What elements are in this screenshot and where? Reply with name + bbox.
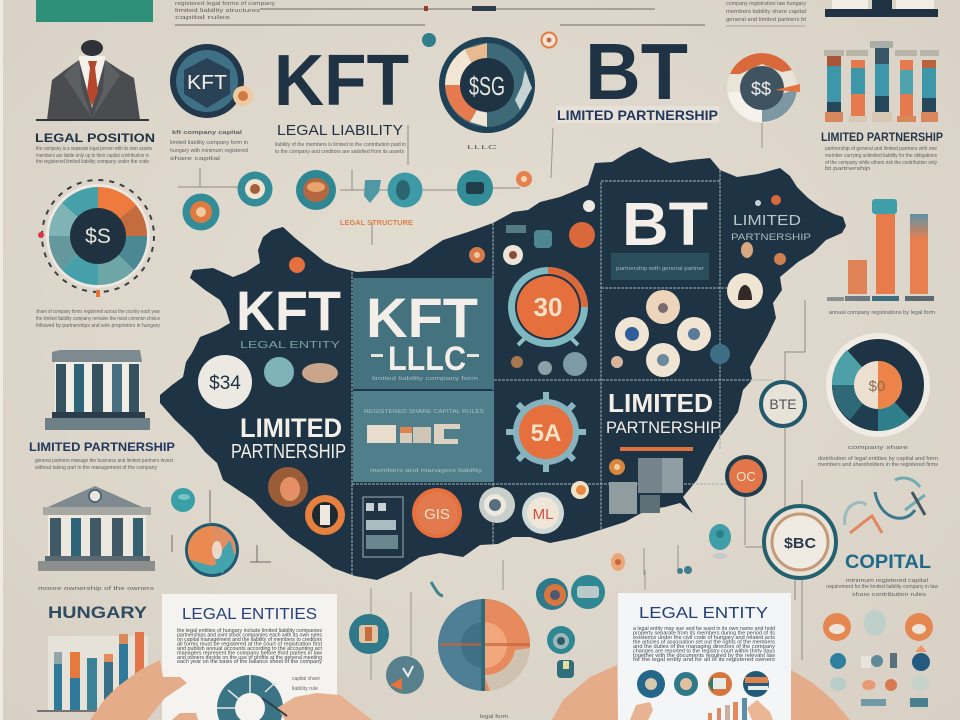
map icon: white rings bbox=[479, 487, 515, 523]
map icons: teal and tan bbox=[264, 357, 338, 387]
text block: donut: members and shareholders in the registered firms bbox=[818, 462, 938, 468]
top header text and rules: capital rules bbox=[175, 15, 230, 21]
document: legal entity: existence under the civil code of hungary and related acts bbox=[633, 635, 776, 641]
top header text and rules bbox=[175, 1, 705, 25]
map panel: BT caption: partnership with general partner bbox=[616, 266, 704, 272]
caption: bar chart: annual company registrations by legal form bbox=[829, 310, 935, 316]
document: legal entities: and owners decide on the use of profits at the general meeting bbox=[177, 655, 322, 661]
map of Hungary bbox=[160, 147, 846, 580]
text block: badge caption: share capital bbox=[170, 156, 220, 162]
map text: limited partnership left: PARTNERSHIP bbox=[231, 441, 346, 463]
text block: legal liability: to the company and creditors are satisfied from its assets bbox=[275, 149, 404, 155]
panel: KFT details teal: members and managers liability bbox=[370, 468, 483, 474]
map icon: white coin bbox=[198, 355, 252, 409]
map icon: orange wheel bbox=[506, 392, 586, 472]
document: legal entity: together with the documents required by the relevant law bbox=[633, 653, 775, 659]
map icon: white coin: $34 bbox=[209, 373, 241, 394]
map icon: orange coin: GIS bbox=[424, 506, 450, 523]
text block: capital: minimum registered capital bbox=[846, 578, 928, 584]
icon: KFT badge bbox=[170, 44, 253, 118]
caption: LLC: LLLC bbox=[467, 145, 497, 151]
pie chart: left wheel: $S bbox=[85, 225, 111, 248]
map icon: orange coin bbox=[412, 488, 462, 538]
document: legal entities: on capital management and the liability of members to creditors bbox=[177, 637, 323, 643]
bar chart: Hungary bbox=[37, 632, 150, 711]
text block: donut: distribution of legal entities by capital and form bbox=[818, 456, 938, 462]
text block: limited partnership left: without taking part in the management of the company bbox=[34, 465, 157, 471]
icon: columns bbox=[45, 350, 150, 430]
panel: KFT LLC teal: KFT bbox=[366, 286, 478, 349]
icon: teal dot bbox=[171, 488, 195, 512]
document: legal entities: each year on the basis of the balance sheet of the company bbox=[177, 659, 323, 665]
heading: limited partnership: LIMITED PARTNERSHIP bbox=[557, 107, 718, 123]
text block: badge caption: kft company capital bbox=[172, 130, 242, 136]
icon: left hand on second document bbox=[552, 665, 618, 720]
map text: BT: BT bbox=[622, 190, 708, 258]
pie chart: orange and teal bbox=[185, 523, 239, 577]
icon: right hand on second document bbox=[791, 670, 850, 720]
icon: slate circle bbox=[386, 656, 424, 694]
top right temple base bbox=[825, 0, 938, 17]
text block: badge caption bbox=[170, 130, 248, 162]
map grid lines bbox=[352, 170, 772, 576]
map text: limited right bbox=[731, 195, 811, 242]
top header text and rules: limited liability structures bbox=[175, 8, 260, 14]
map icons: cream cluster bbox=[611, 242, 786, 377]
icon: OC orange ring bbox=[725, 455, 767, 497]
text block: wheel: share of company forms registered across the country each year bbox=[36, 309, 160, 315]
icon: business suit bbox=[36, 40, 149, 121]
text block: partnership right: member carrying unlimited liability for the obligations bbox=[825, 153, 937, 159]
icon: BC ring bbox=[764, 506, 836, 578]
document: legal entities: and publish annual accounts according to the accounting act bbox=[177, 646, 323, 652]
map text: limited partnership right: PARTNERSHIP bbox=[606, 418, 721, 437]
text block: partnership right: bt partnership bbox=[825, 166, 870, 172]
icon: orange ring dot bbox=[542, 32, 556, 48]
document: legal entities: partnerships and joint stock companies each with its own rules bbox=[177, 632, 323, 638]
document: legal entity: the articles of association set out the rights of the members bbox=[633, 640, 776, 646]
text block: badge caption: limited liability company form in bbox=[170, 140, 248, 146]
map panel: small document bbox=[363, 497, 403, 557]
top green banner bbox=[36, 0, 153, 22]
top right text block: general and limited partners bt bbox=[726, 17, 806, 23]
map text: limited partnership left: LIMITED bbox=[240, 413, 342, 443]
donut: right: $0 bbox=[869, 378, 885, 395]
text block: capital bbox=[826, 578, 939, 598]
text block: partnership right: partnership of general and limited partners with one bbox=[825, 146, 937, 152]
map text: KFT: KFT bbox=[236, 279, 341, 342]
document: legal entity: property separate from its members during the period of its bbox=[633, 630, 776, 636]
icon grid: capital bbox=[823, 610, 933, 707]
map icons: small circles bbox=[503, 200, 595, 534]
document: legal entities bbox=[162, 594, 337, 720]
document: legal entities: the legal entities of hungary include limited liability companies bbox=[177, 628, 323, 634]
text block: limited partnership left bbox=[34, 458, 173, 471]
dot: small teal marks bbox=[677, 566, 692, 574]
document: legal entities: liability rule bbox=[292, 686, 318, 692]
icon: orange pin bbox=[611, 553, 625, 571]
footer caption: legal form bbox=[480, 714, 508, 720]
map text: limited partnership right: LIMITED bbox=[608, 388, 713, 418]
map icon: orange wheel: 5A bbox=[531, 420, 561, 447]
text block: wheel: followed by partnerships and sole proprietors in hungary bbox=[36, 323, 160, 329]
top right text block: members liability share capital bbox=[726, 9, 806, 15]
top right text block bbox=[726, 1, 806, 26]
text block: legal position: the registered limited liability company under the code bbox=[36, 159, 149, 165]
panel: KFT LLC teal: LLLC bbox=[388, 340, 466, 378]
text block: legal position: the company is a separate legal person with its own assets bbox=[36, 146, 152, 152]
icon: small shield bbox=[557, 660, 574, 678]
text block: partnership right: of the company while others risk the contribution only bbox=[825, 160, 937, 166]
caption: orange label: LEGAL STRUCTURE bbox=[340, 220, 413, 227]
icon: left finger on document bbox=[172, 713, 198, 720]
text block: legal position bbox=[36, 146, 152, 165]
fan chart bbox=[438, 599, 530, 691]
icon: left thumb bbox=[630, 702, 653, 720]
map icons: orange dots bbox=[289, 247, 485, 273]
icon: BC ring: $BC bbox=[784, 535, 816, 552]
map icons: photo cards bbox=[609, 449, 693, 514]
map icon: orange with dark centre bbox=[305, 495, 345, 535]
donut: capital: $SG bbox=[469, 71, 505, 101]
heading: Hungary: HUNGARY bbox=[48, 603, 148, 622]
document: legal entities: managers represent the company before third parties in law bbox=[177, 650, 322, 656]
document: legal entity: for the legal entity and for all of its registered owners bbox=[633, 657, 776, 663]
map text: small label: LEGAL ENTITY bbox=[240, 340, 340, 351]
map text: limited partnership left bbox=[231, 413, 346, 463]
document: legal entity: and the duties of the managing directors of the company bbox=[633, 644, 776, 650]
panel: KFT details teal bbox=[353, 391, 494, 482]
icon: right thumb bbox=[747, 700, 773, 720]
heading: capital: COPITAL bbox=[845, 552, 931, 573]
caption: temple: moore ownership of the owners bbox=[38, 586, 154, 592]
icon: BTE ring: BTE bbox=[769, 396, 797, 412]
donut: capital bbox=[439, 37, 535, 133]
pie chart: left wheel bbox=[38, 180, 154, 297]
top header text and rules: registered legal forms of company bbox=[175, 1, 275, 7]
map text: limited right: PARTNERSHIP bbox=[731, 232, 811, 242]
icon: KFT badge: KFT bbox=[187, 72, 227, 94]
icon: swirl curves bbox=[845, 478, 925, 533]
text block: partnership right bbox=[825, 146, 937, 172]
title: BT: BT bbox=[585, 27, 688, 116]
heading: legal liability: LEGAL LIABILITY bbox=[277, 122, 403, 139]
map icon: orange gear: 30 bbox=[534, 292, 562, 322]
icon: colourful columns bbox=[824, 41, 939, 122]
document: legal entity: changes are reported to the registry court within thirty days bbox=[633, 648, 776, 654]
document: legal entities: capital share bbox=[292, 676, 320, 682]
text block: badge caption: hungary with minimum registered bbox=[170, 148, 248, 154]
text block: donut bbox=[818, 445, 938, 468]
map icons: small circles: ML bbox=[533, 506, 553, 523]
text block: legal liability: liability of the members is limited to the contribution paid in bbox=[275, 142, 406, 148]
icon: BTE ring bbox=[761, 382, 805, 426]
document: legal entities: all forms must be registered at the court of registration first bbox=[177, 642, 323, 648]
donut: BT: $$ bbox=[751, 79, 771, 99]
panel: KFT LLC teal: limited liability company form bbox=[372, 376, 478, 382]
timeline icons row bbox=[178, 125, 532, 245]
top right text block: company registration law hungary bbox=[726, 1, 806, 7]
icon: teal target bbox=[547, 626, 575, 654]
title: KFT: KFT bbox=[274, 41, 409, 121]
text block: legal position: members are liable only up to their capital contribution in bbox=[36, 153, 149, 159]
icon: teal dot bbox=[422, 33, 436, 47]
document: legal entity: a legal entity may sue and be sued in its own name and hold bbox=[633, 626, 775, 632]
icon: teal drop bbox=[709, 524, 731, 559]
text block: legal liability bbox=[275, 142, 406, 155]
icon: OC orange ring: OC bbox=[736, 469, 756, 484]
text block: donut: company share bbox=[848, 445, 908, 451]
text block: wheel bbox=[36, 309, 160, 329]
text block: capital: requirement for the limited liability company in law bbox=[826, 584, 939, 590]
map panel: BT caption bbox=[611, 253, 709, 280]
heading: limited partnership right: LIMITED PARTNERSHIP bbox=[821, 130, 943, 144]
panel: KFT details teal: REGISTERED SHARE CAPITAL RULES bbox=[364, 409, 485, 415]
map text: limited right: LIMITED bbox=[733, 212, 801, 229]
donut: right bbox=[826, 333, 930, 437]
icon: right hand on document bbox=[277, 693, 372, 720]
icon: left hand on document bbox=[90, 660, 187, 720]
text block: limited partnership left: general partners manage the business and limited partners invest bbox=[35, 458, 173, 464]
map icon: orange gear bbox=[508, 267, 588, 347]
document: legal entity bbox=[618, 593, 791, 720]
bar chart: right bbox=[827, 199, 934, 301]
heading: legal position: LEGAL POSITION bbox=[35, 131, 155, 145]
text block: capital: share contribution rules bbox=[852, 592, 926, 598]
icons: ringed pair bbox=[536, 575, 605, 610]
map icon: brown circle bbox=[268, 467, 308, 507]
map text: limited partnership right bbox=[606, 388, 721, 437]
document: legal entity: LEGAL ENTITY bbox=[639, 605, 768, 622]
document: legal entities: LEGAL ENTITIES bbox=[182, 606, 317, 623]
heading: limited partnership left: LIMITED PARTNERSHIP bbox=[29, 440, 175, 454]
icon: ring lower left bbox=[349, 614, 389, 654]
donut: BT bbox=[727, 53, 800, 123]
text block: wheel: the limited liability company remains the most common choice bbox=[36, 316, 160, 322]
panel: KFT LLC teal bbox=[353, 278, 494, 389]
icon: temple bbox=[38, 486, 155, 571]
